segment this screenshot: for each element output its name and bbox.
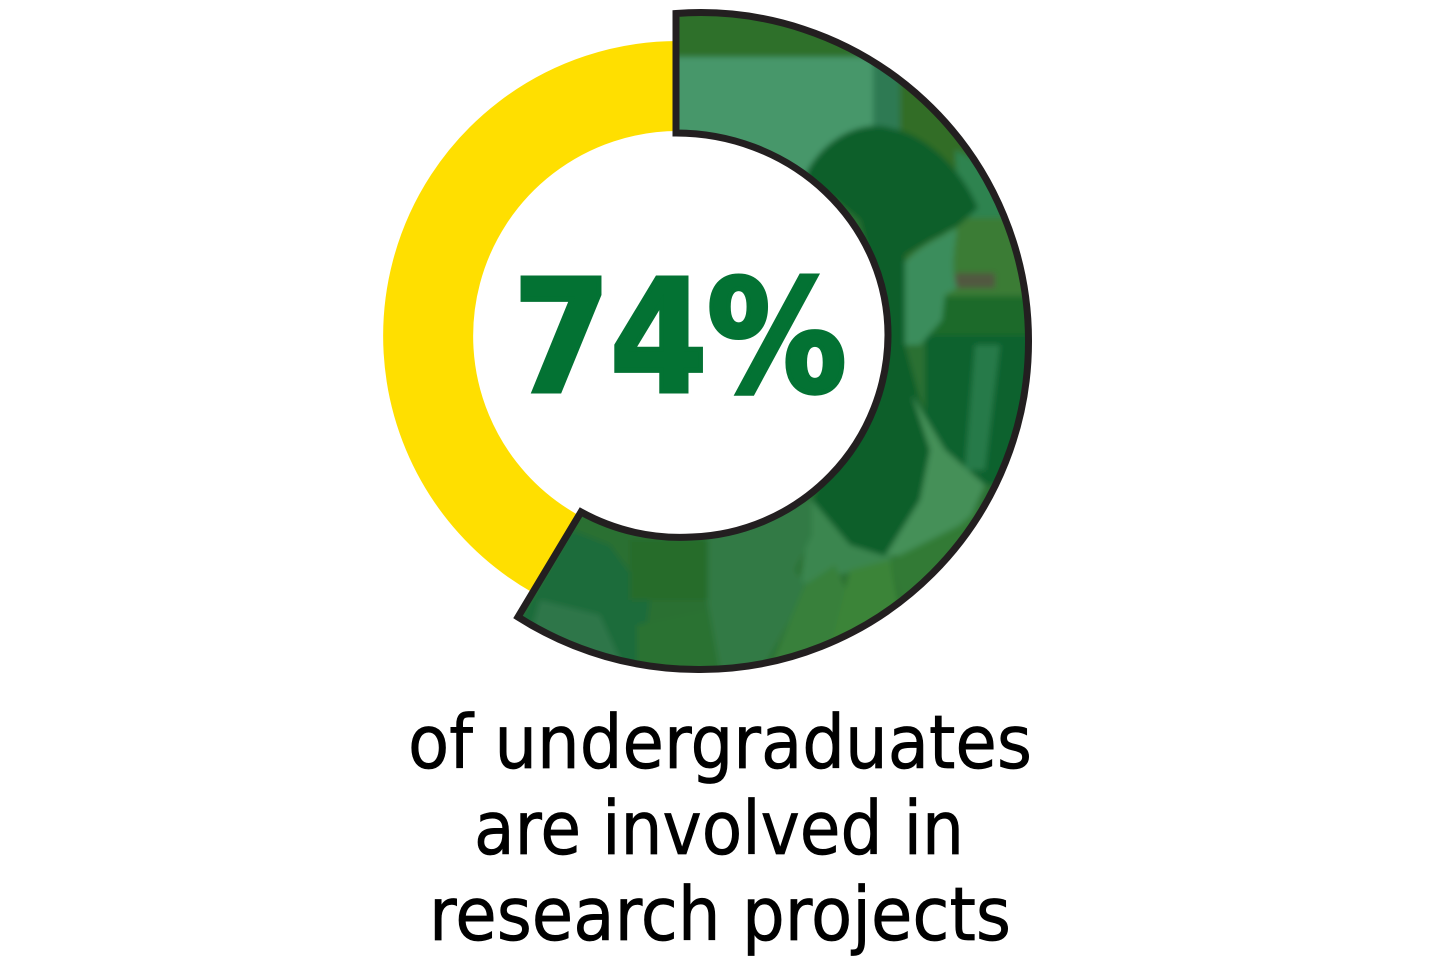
segment photo: student reading in green duotone — [522, 16, 1025, 666]
headline number: 74%: 74% — [514, 247, 846, 428]
caption: description of the statistic: of undergraduates — [408, 700, 1032, 786]
caption: description of the statistic: research projects — [429, 872, 1011, 958]
shoulder — [885, 395, 985, 556]
face — [905, 228, 957, 345]
sweater — [524, 534, 646, 660]
caption: description of the statistic — [408, 700, 1032, 958]
donut remainder: yellow ring — [428, 86, 678, 553]
donut segment: 74% photo arc — [513, 9, 1032, 673]
caption: description of the statistic: are involved in — [474, 786, 964, 872]
hair — [805, 126, 978, 556]
blouse — [707, 498, 812, 670]
hands and sleeve — [775, 567, 844, 657]
neck — [800, 500, 900, 585]
infographic: donut chart with caption — [383, 9, 1032, 956]
